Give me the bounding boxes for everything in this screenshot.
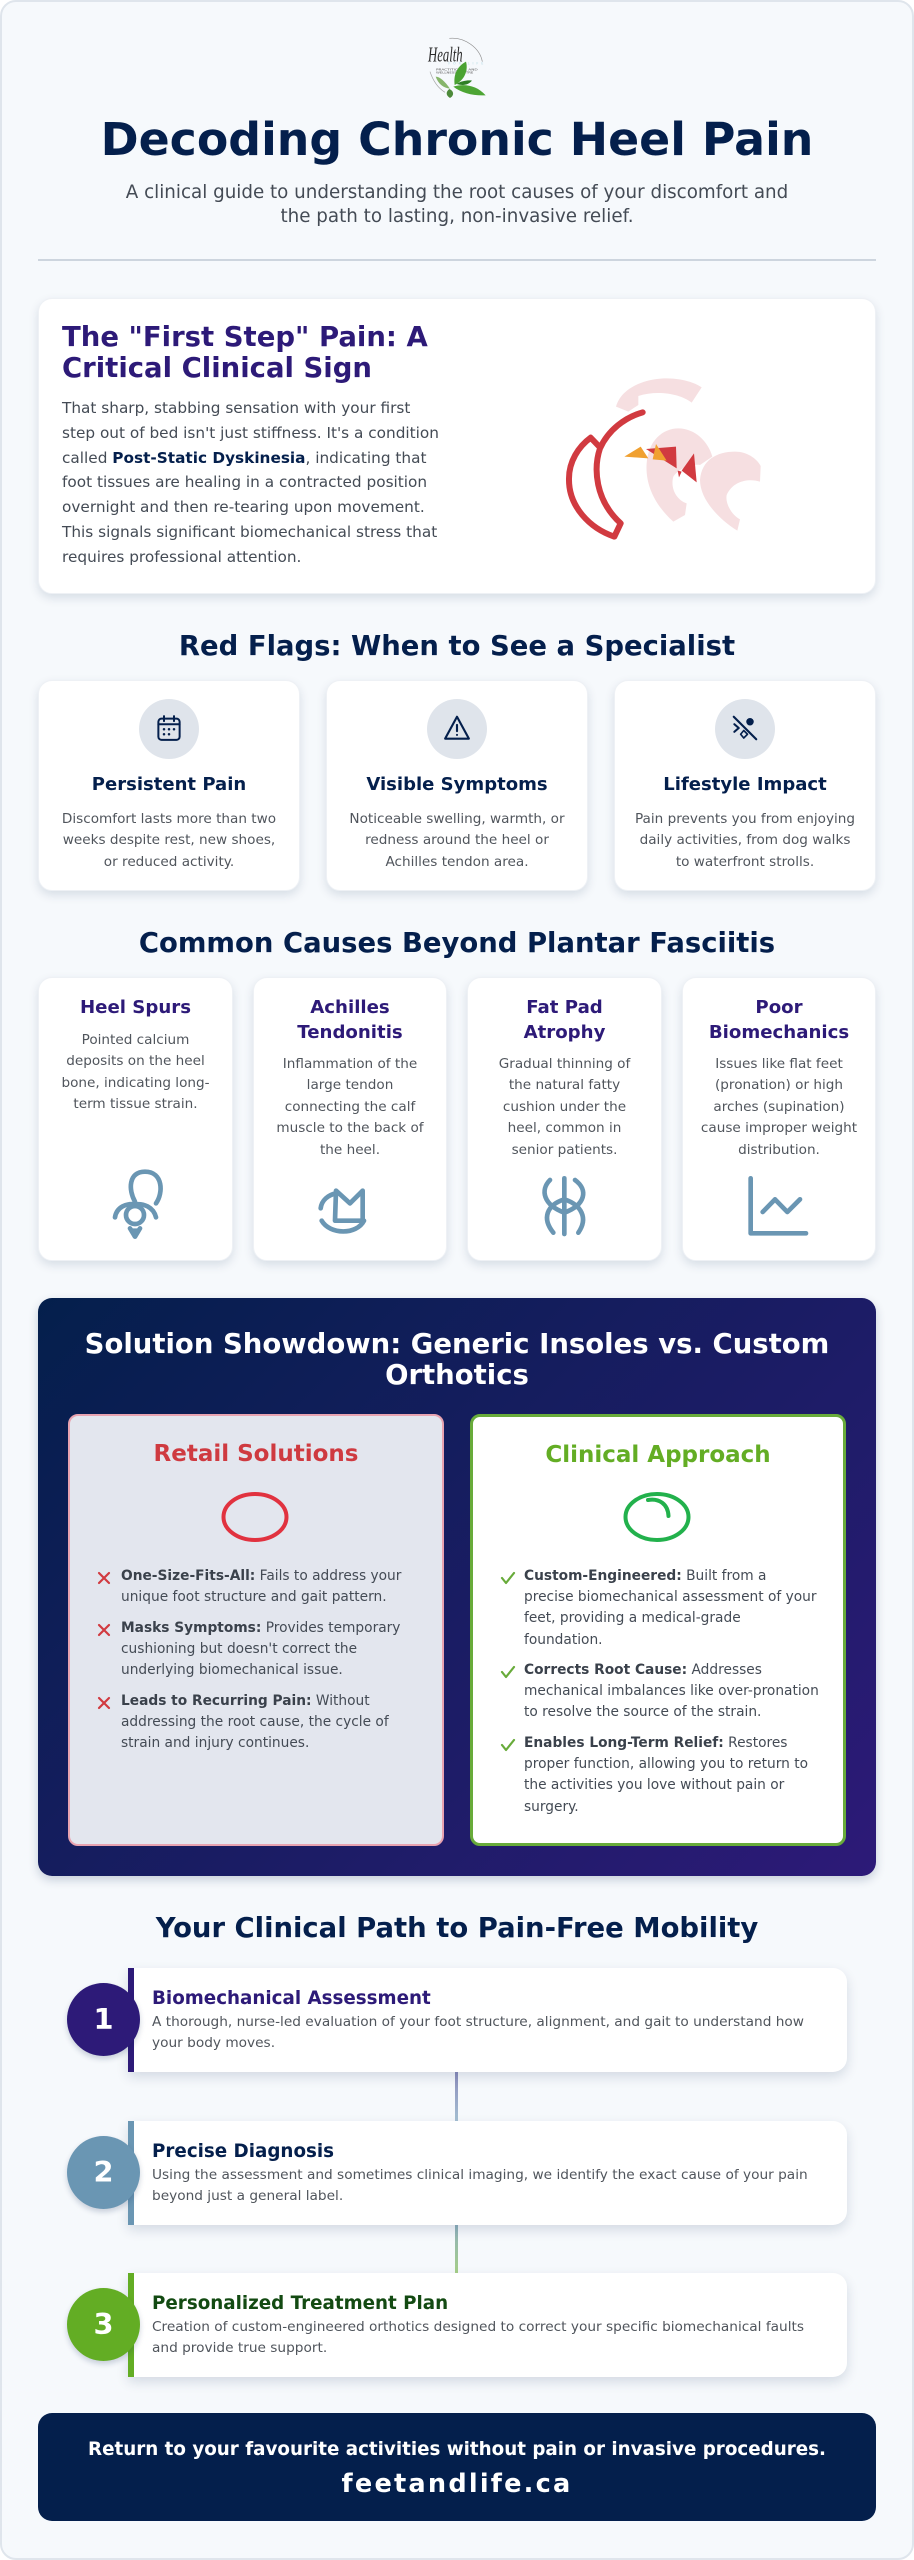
list item: One-Size-Fits-All: Fails to address your <box>121 1568 401 1584</box>
step 2 number <box>67 2136 140 2209</box>
list item <box>98 1692 389 1751</box>
heading: Achilles <box>310 997 390 1018</box>
icon: warning <box>427 699 487 759</box>
list item: cushioning but doesn't correct the <box>121 1641 357 1657</box>
showdown heading: Orthotics <box>385 1359 529 1391</box>
list item: underlying biomechanical issue. <box>121 1662 343 1678</box>
description <box>62 811 276 870</box>
list item: feet, providing a medical-grade <box>524 1610 741 1626</box>
footer website: feetandlife.ca <box>342 2469 572 2499</box>
icon: check <box>500 1572 516 1584</box>
list item: surgery. <box>524 1799 579 1815</box>
hero body text: overnight and then re-tearing upon movement. <box>62 498 425 516</box>
description: or reduced activity. <box>104 854 234 870</box>
footer banner <box>38 2413 876 2521</box>
description: arches (supination) <box>713 1099 845 1115</box>
showdown heading <box>85 1328 829 1391</box>
connector: step 1 to 2 <box>455 2072 458 2121</box>
hero body text: step out of bed isn't just stiffness. It's a condition <box>62 424 439 442</box>
list item <box>500 1662 819 1720</box>
footer message: Return to your favourite activities without pain or invasive procedures. <box>88 2439 826 2460</box>
description: to waterfront strolls. <box>676 854 814 870</box>
step 3 number: 3 <box>93 2307 114 2341</box>
description: redness around the heel or <box>365 832 549 848</box>
step 2 number: 2 <box>93 2155 114 2189</box>
description: Pain prevents you from enjoying <box>635 811 855 827</box>
list item <box>98 1620 400 1678</box>
hero heading <box>62 321 428 384</box>
description: bone, indicating long- <box>61 1075 210 1091</box>
step description <box>152 2014 804 2051</box>
hero body text: requires professional attention. <box>62 548 301 566</box>
icon: heel spur <box>112 1169 163 1239</box>
panel: poor biomechanics <box>682 977 876 1261</box>
step description: and provide true support. <box>152 2340 327 2356</box>
heading: Lifestyle Impact <box>663 774 827 795</box>
list item: Enables Long-Term Relief: Restores <box>524 1734 787 1750</box>
step 3 number <box>67 2288 140 2361</box>
panel: heel spurs <box>38 977 233 1261</box>
heading: Biomechanics <box>709 1022 849 1042</box>
list item: mechanical imbalances like over-pronation <box>524 1683 819 1699</box>
icon: cross <box>98 1572 110 1584</box>
logo: PRACTITIONER AND <box>436 67 479 71</box>
panel: visible symptoms <box>326 680 588 891</box>
list item <box>500 1568 817 1648</box>
heading: Tendonitis <box>297 1022 403 1042</box>
list item: to resolve the source of the strain. <box>524 1704 761 1720</box>
description: deposits on the heel <box>66 1053 205 1069</box>
step description <box>152 2166 808 2204</box>
list item: strain and injury continues. <box>121 1735 309 1751</box>
panel: solution showdown <box>38 1298 876 1876</box>
description: Pointed calcium <box>82 1032 189 1048</box>
panel: fat pad atrophy <box>467 977 662 1261</box>
icon: check <box>500 1666 516 1678</box>
connector: step 2 to 3 <box>455 2224 458 2273</box>
description: heel, common in <box>508 1120 621 1136</box>
description <box>61 1032 210 1112</box>
hero body text: foot tissues are healing in a contracted position <box>62 473 427 491</box>
heading: Atrophy <box>524 1022 605 1042</box>
panel: retail solutions <box>68 1414 444 1846</box>
heading: Fat Pad <box>526 997 603 1018</box>
title: Decoding Chronic Heel Pain <box>101 112 813 166</box>
description: cause improper weight <box>701 1120 857 1136</box>
description: (pronation) or high <box>715 1077 843 1093</box>
heel illustration <box>566 378 761 540</box>
description: the heel. <box>320 1142 380 1158</box>
list item: unique foot structure and gait pattern. <box>121 1589 387 1605</box>
description: term tissue strain. <box>73 1096 198 1112</box>
icon: calendar <box>139 699 199 759</box>
list item <box>98 1568 402 1605</box>
logo: FOR LIFE <box>448 62 483 66</box>
description: large tendon <box>307 1077 393 1093</box>
heading: red flags: Red Flags: When to See a Specialist <box>179 631 735 662</box>
list item: Custom-Engineered: Built from a <box>524 1568 766 1584</box>
icon: check <box>500 1738 516 1752</box>
list item: precise biomechanical assessment of your <box>524 1589 817 1605</box>
description: Noticeable swelling, warmth, or <box>349 811 565 827</box>
step 1 number <box>67 1983 140 2056</box>
hero body text <box>62 399 439 566</box>
panel: persistent pain <box>38 680 300 891</box>
description <box>349 811 565 870</box>
step 1 number: 1 <box>93 2002 114 2036</box>
hero body text: called Post-Static Dyskinesia, indicating that <box>62 448 426 466</box>
heading: Heel Spurs <box>80 997 191 1018</box>
panel: achilles tendonitis <box>253 977 447 1261</box>
list item: Corrects Root Cause: Addresses <box>524 1662 762 1678</box>
icon: clinical oval <box>624 1492 690 1542</box>
logo: Health <box>427 45 463 67</box>
step heading: Precise Diagnosis <box>152 2141 334 2162</box>
icon: cross <box>98 1624 110 1636</box>
icon: retail oval <box>222 1492 288 1542</box>
description: senior patients. <box>512 1142 617 1158</box>
icon: fat pad <box>542 1176 586 1236</box>
heading: clinical path: Your Clinical Path to Pain-Free Mobility <box>156 1913 758 1944</box>
description: the natural fatty <box>509 1077 620 1093</box>
step description: Creation of custom-engineered orthotics designed to correct your specific biomechanical faults <box>152 2318 804 2334</box>
panel: first step pain <box>38 298 876 594</box>
heading <box>524 997 606 1042</box>
heading: Visible Symptoms <box>366 774 548 795</box>
description: Inflammation of the <box>283 1056 417 1072</box>
logo <box>427 38 486 98</box>
description <box>635 811 855 870</box>
step description: A thorough, nurse-led evaluation of your foot structure, alignment, and gait to understand how <box>152 2014 804 2030</box>
heading: common causes: Common Causes Beyond Plantar Fasciitis <box>139 928 775 959</box>
description: daily activities, from dog walks <box>640 832 850 848</box>
description: weeks despite rest, new shoes, <box>63 832 275 848</box>
step description: your body moves. <box>152 2035 275 2051</box>
step description <box>152 2318 804 2356</box>
list item: foundation. <box>524 1632 603 1648</box>
description <box>499 1056 631 1158</box>
description: muscle to the back of <box>276 1120 424 1136</box>
icon: line chart <box>748 1176 808 1236</box>
step 3 card <box>128 2273 847 2377</box>
step description: beyond just a general label. <box>152 2188 343 2204</box>
description: Gradual thinning of <box>499 1056 630 1072</box>
list item: Masks Symptoms: Provides temporary <box>121 1620 400 1636</box>
hero body text: That sharp, stabbing sensation with your first <box>62 399 410 417</box>
showdown heading: Solution Showdown: Generic Insoles vs. Custom <box>85 1328 829 1360</box>
icon: crossed out activity <box>715 699 775 759</box>
heading: Poor <box>755 997 803 1018</box>
description: distribution. <box>738 1142 820 1158</box>
hero heading: The "First Step" Pain: A <box>62 321 428 353</box>
description: Discomfort lasts more than two <box>62 811 276 827</box>
description: Issues like flat feet <box>715 1056 843 1072</box>
heading <box>709 997 849 1042</box>
step description: Using the assessment and sometimes clinical imaging, we identify the exact cause of your pain <box>152 2166 808 2182</box>
panel: lifestyle impact <box>614 680 876 891</box>
heading <box>297 997 403 1042</box>
list item: Leads to Recurring Pain: Without <box>121 1692 370 1708</box>
description: Achilles tendon area. <box>385 854 529 870</box>
list item: addressing the root cause, the cycle of <box>121 1714 389 1730</box>
clinical heading: Clinical Approach <box>545 1442 771 1468</box>
description: connecting the calf <box>285 1099 415 1115</box>
panel: clinical approach <box>470 1414 846 1846</box>
description <box>701 1056 857 1158</box>
subtitle: the path to lasting, non-invasive relief. <box>280 206 634 227</box>
hero body text: This signals significant biomechanical stress that <box>62 523 437 541</box>
step heading: Personalized Treatment Plan <box>152 2293 448 2314</box>
icon: achilles tendon <box>318 1188 366 1234</box>
logo: WELLNESS CENTRE <box>436 71 474 75</box>
step 1 card <box>128 1968 847 2072</box>
description: cushion under the <box>503 1099 626 1115</box>
icon: cross <box>98 1696 110 1710</box>
step heading: Biomechanical Assessment <box>152 1988 431 2009</box>
list item: proper function, allowing you to return to <box>524 1756 808 1772</box>
list item <box>500 1734 808 1815</box>
subtitle <box>126 182 788 227</box>
step 2 card <box>128 2121 847 2225</box>
description <box>276 1056 424 1158</box>
retail heading: Retail Solutions <box>154 1440 358 1466</box>
subtitle: A clinical guide to understanding the root causes of your discomfort and <box>126 182 788 202</box>
hero heading: Critical Clinical Sign <box>62 352 372 384</box>
list item: the activities you love without pain or <box>524 1777 784 1793</box>
heading: Persistent Pain <box>92 774 246 795</box>
